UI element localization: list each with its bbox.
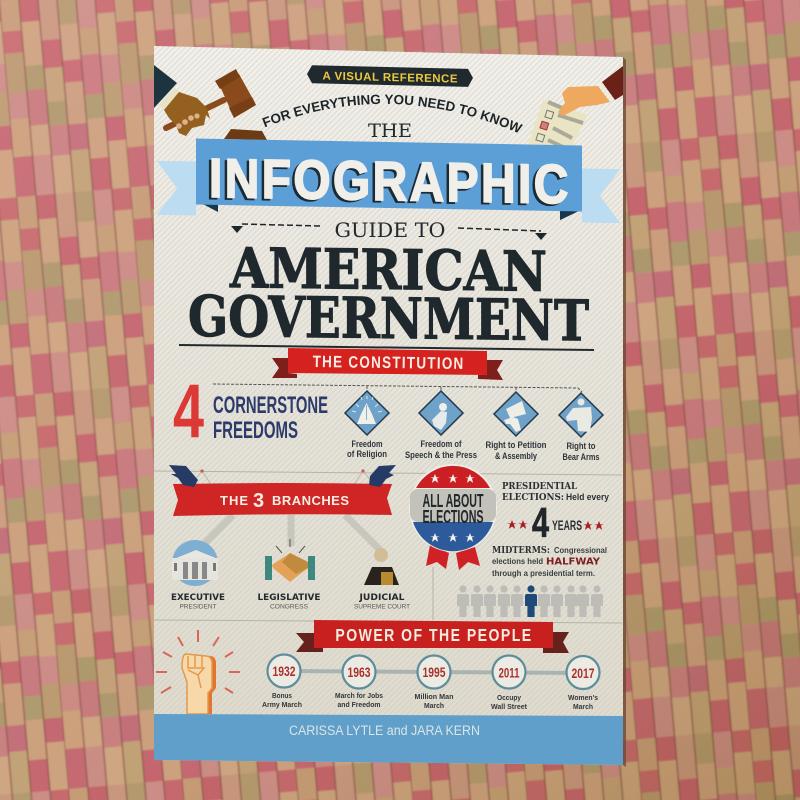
stat: 4 cornerstone freedoms: FREEDOMS (213, 417, 298, 444)
stat: 4 cornerstone freedoms (173, 369, 328, 454)
timeline: 1932: 1932 (272, 663, 296, 679)
pictogram: one in eleven people (457, 585, 603, 617)
label: right to petition: Right to Petition (486, 440, 546, 450)
label: million man march (414, 692, 454, 710)
text: midterms: through a presidential term. (492, 568, 595, 578)
banner: the 3 branches: THE (220, 493, 248, 508)
label: freedom of religion (347, 439, 387, 459)
icon: right to bear arms (559, 393, 603, 437)
stat: every 4 years: 4 (532, 499, 549, 546)
label: legislative: CONGRESS (270, 604, 309, 610)
badge: all about elections (409, 464, 497, 570)
icon: right eagle wing (369, 465, 396, 487)
label: legislative: LEGISLATIVE (258, 593, 320, 603)
label: women's march: Women's (568, 693, 598, 702)
icon: hand with gavel (154, 65, 267, 140)
text: midterms: elections held (492, 556, 543, 566)
timeline: 1995 (418, 656, 450, 688)
text: midterms: Congressional (554, 545, 607, 555)
label: women's march (568, 693, 598, 711)
banner: the constitution: THE CONSTITUTION (313, 353, 465, 373)
heading: american government: AMERICAN (229, 235, 547, 304)
timeline line (284, 671, 583, 673)
icon: raised fist (156, 630, 240, 714)
label: legislative (258, 593, 320, 610)
label: occupy wall street: Wall Street (491, 702, 527, 711)
text: midterms: MIDTERMS: (492, 546, 550, 556)
label: executive: PRESIDENT (180, 604, 217, 610)
banner: the 3 branches (173, 469, 392, 516)
icon: right to petition (494, 392, 538, 436)
stat: every 4 years (507, 499, 604, 546)
label: bonus army march (262, 691, 302, 709)
label: right to bear arms (562, 441, 600, 462)
badge: all about elections: ELECTIONS (422, 507, 484, 527)
beams linking branches (205, 515, 380, 550)
stat: every 4 years: YEARS (552, 518, 582, 533)
label: judicial (354, 593, 410, 610)
banner: infographic: INFOGRAPHIC (209, 147, 571, 215)
label: freedom of religion: of Religion (347, 449, 387, 459)
icon: left eagle wing (169, 465, 198, 487)
book cover (154, 46, 626, 767)
icon: freedom of religion (345, 391, 389, 435)
footer band with authors: CARISSA LYTLE and JARA KERN (289, 723, 480, 738)
label: right to bear arms: Bear Arms (562, 452, 600, 462)
label: right to petition: & Assembly (495, 451, 537, 461)
banner: the 3 branches: BRANCHES (272, 493, 349, 508)
timeline: 2017 (566, 656, 600, 689)
label: bonus army march: Army March (262, 700, 302, 709)
timeline: 2017: 2017 (572, 665, 595, 681)
icon: handshake (265, 539, 315, 582)
icon: freedom of speech and press (419, 391, 463, 435)
label: march for jobs and freedom: and Freedom (338, 700, 381, 709)
label: judicial: SUPREME COURT (354, 604, 410, 610)
text: presidential elections: Held every (566, 492, 610, 503)
banner: power of the people: POWER OF THE PEOPLE (335, 625, 533, 645)
heading: guide to with arrows (231, 218, 547, 242)
icon: white house (172, 540, 218, 586)
label: march for jobs and freedom (335, 691, 383, 709)
stat: 4 cornerstone freedoms: 4 (173, 369, 204, 454)
text: midterms: HALFWAY (546, 556, 600, 568)
badge: a visual reference: A VISUAL REFERENCE (322, 71, 458, 86)
label: march for jobs and freedom: March for Jobs (335, 691, 383, 700)
label: executive: EXECUTIVE (171, 593, 225, 603)
icon: judge (364, 548, 399, 585)
heading: american government: GOVERNMENT (188, 284, 589, 354)
label: million man march: Million Man (414, 692, 454, 701)
label: right to bear arms: Right to (566, 441, 596, 451)
label: right to petition (486, 440, 546, 461)
badge: a visual reference (307, 65, 473, 87)
heading: the: THE (368, 120, 412, 142)
banner: power of the people (296, 620, 569, 653)
label: judicial: JUDICIAL (358, 593, 405, 603)
text: presidential elections: PRESIDENTIAL (502, 482, 578, 492)
heading: guide to with arrows: GUIDE TO (334, 218, 446, 242)
banner: the constitution (272, 348, 503, 380)
text: presidential elections (502, 482, 610, 503)
banner: infographic: INFOGRAPHIC (206, 148, 568, 217)
label: bonus army march: Bonus (272, 691, 292, 700)
text: presidential elections: ELECTIONS: (502, 493, 564, 503)
label: freedom of speech (405, 439, 477, 460)
text: midterms (492, 545, 607, 578)
timeline: 1932 (268, 654, 300, 688)
timeline: 1995: 1995 (422, 664, 446, 680)
label: freedom of speech: Freedom of (420, 439, 462, 449)
timeline: 1963: 1963 (348, 664, 371, 680)
badge: all about elections: ALL ABOUT (422, 491, 484, 511)
label: occupy wall street (491, 693, 527, 711)
heading: american government (188, 235, 589, 354)
label: women's march: March (573, 702, 593, 711)
label: executive (171, 593, 225, 610)
label: freedom of speech: Speech & the Press (405, 450, 477, 460)
banner: the 3 branches: 3 (253, 490, 264, 512)
stat: 4 cornerstone freedoms: CORNERSTONE (213, 392, 328, 419)
label: occupy wall street: Occupy (497, 693, 522, 702)
timeline: 2011: 2011 (498, 664, 520, 680)
label: freedom of religion: Freedom (352, 439, 382, 449)
subtitle arc: FOR EVERYTHING YOU NEED TO KNOW (262, 94, 523, 133)
footer band with authors (154, 714, 623, 765)
icon: hand marking a ballot (527, 66, 623, 150)
timeline: 2011 (492, 656, 526, 688)
timeline: 1963 (342, 656, 376, 688)
banner: infographic (157, 138, 620, 223)
label: million man march: March (424, 701, 444, 710)
